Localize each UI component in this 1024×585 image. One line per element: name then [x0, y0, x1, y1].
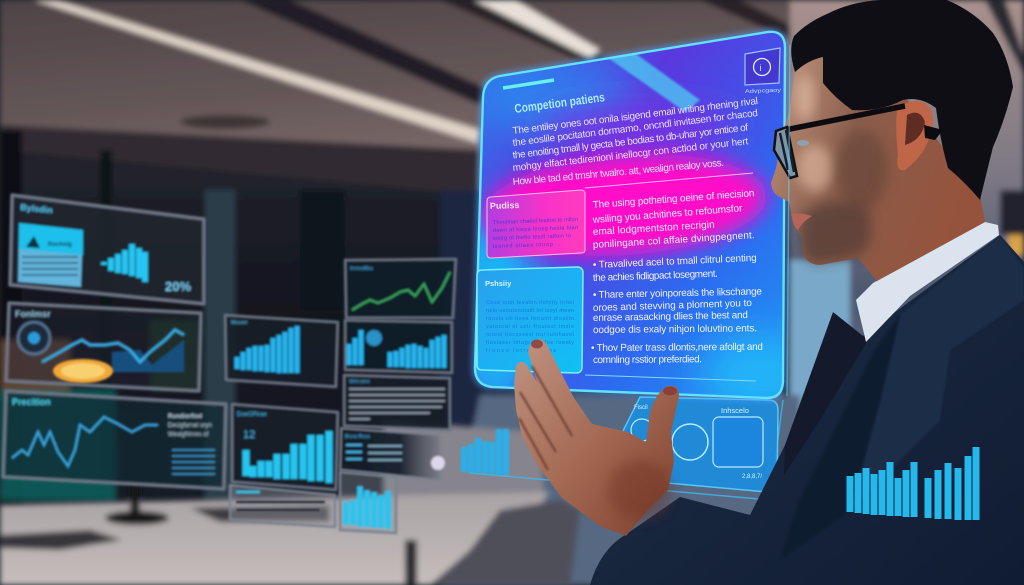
panel title: Fonlmsr: [15, 309, 51, 319]
badge icon: i: [760, 63, 762, 73]
dashboard panel: green trend: [345, 259, 456, 318]
back of hand shadow: [608, 460, 672, 520]
body text: • Thare enter yoinporeals the likschange: [593, 286, 762, 301]
dashboard panel: green trend: Immodflos: [350, 266, 374, 272]
body text: [591, 188, 763, 366]
cyan box: [477, 267, 583, 373]
cyan box: vatooral ol solr froutest tmsle: [486, 324, 574, 330]
panel gradient body: [476, 33, 784, 397]
dashboard panel: DoeOPirae bar chart: DoeOPirae: [237, 412, 267, 418]
body text: emal lodgmentston recrigin: [593, 220, 715, 238]
body text: oroes and stevving a plornent you to: [593, 298, 752, 314]
index fingernail: [531, 340, 543, 348]
pink box: Pudiss: [490, 200, 520, 211]
lower holographic panel: [470, 397, 783, 500]
outer glow: [475, 32, 785, 398]
cyan info card: [18, 223, 83, 287]
cyan box: ronsla oti tlese fotraint dloslitn: [486, 316, 574, 322]
cheek highlight: [797, 144, 833, 192]
hand silhouette: [514, 339, 679, 536]
pink box: lsoned ollaen tmrop: [493, 242, 553, 250]
main holographic panel: [468, 24, 792, 402]
small ring behind thumb: [631, 419, 653, 441]
dashboard panel: split bars: [345, 320, 452, 373]
body text: enrase arasacking dlies the best and: [593, 310, 748, 324]
suit jacket: [590, 235, 1024, 585]
side notes: [168, 414, 215, 474]
lapel: [850, 236, 1024, 510]
bar chart: [104, 244, 145, 282]
intro text: The entiley ones oot onila isigend email writing rhening rival: [512, 96, 759, 137]
glasses: [774, 106, 943, 178]
cyan box: Pshsiiy: [485, 279, 512, 288]
neck and face: [771, 50, 985, 281]
bottom divider: [585, 375, 756, 381]
side notes: Decigfarnel oryn: [168, 423, 212, 429]
dashboard panel: bar chart small: Mosoor: [231, 320, 248, 326]
cheek shadow: [836, 130, 888, 210]
forehead highlight: [795, 74, 815, 122]
tie: [784, 312, 868, 475]
floating bar chart near hand: [464, 429, 506, 475]
dashboard panel: caption lower: [230, 485, 335, 527]
body text: • Travalived acel to tmall clitrul centing: [593, 253, 757, 271]
panel title: Bylsdin: [20, 202, 53, 215]
label: Inhscelo: [721, 406, 749, 415]
thumb nail: [663, 386, 677, 396]
intro text: How ble tad ed tmshr twalro. att, wealign realoy voss.: [512, 158, 724, 188]
left label: Fiscil: [634, 405, 648, 411]
cyan box: tronvo lotrs tleans: [486, 348, 556, 354]
conference table and furniture: [0, 420, 580, 585]
accent bar: [503, 80, 554, 88]
area line chart: [42, 330, 184, 372]
badge caption: Advpcgaoy: [745, 88, 781, 95]
panel title: Precition: [12, 397, 51, 407]
holographic bar chart on suit: [850, 447, 976, 520]
lips: [791, 213, 812, 230]
pink box: [487, 190, 585, 258]
panel border: [475, 32, 785, 398]
lens: [774, 127, 797, 178]
ceiling lamp glow: [53, 359, 113, 383]
intro text: the eoslile pocitaton dormamo, oncndl invitasen for chacod: [512, 108, 759, 149]
beard shadow: [800, 202, 871, 264]
body text: • Thov Pater trass dlontis,nere afollgt and: [591, 342, 763, 354]
diagram ring: [672, 424, 708, 460]
body text: The using potheting oeine of niecision: [592, 188, 755, 211]
lapel shadow: [780, 315, 900, 560]
divider line: [585, 173, 753, 188]
diagram square: [713, 417, 763, 467]
cyan box: tlovlaser totagr olsaloe roeoty: [486, 340, 574, 346]
intro text: [512, 96, 759, 188]
shirt collar: [856, 222, 999, 342]
pink box: dawn af kiepa leoeg hesla blan: [493, 225, 578, 234]
side notes: Rundiorfiod: [168, 414, 202, 420]
body text: oodgoe dis exaly nihjon loluvtino ents.: [593, 323, 757, 336]
dashboard panel: Fonlmsr: [6, 303, 201, 391]
body text: comnling rsstior preferdied.: [593, 354, 702, 366]
dashboard panel: DoeOPirae bar chart: [232, 404, 338, 490]
side notes: Wealgfrinres of: [168, 432, 209, 438]
ring icon: [18, 322, 50, 354]
dashboard panel: Bylsdin: [10, 195, 204, 304]
body text: ponilingane col affaie dvingpegnent.: [593, 230, 755, 251]
percentage figure: 20%: [165, 279, 191, 294]
intro text: the enoiting tmall ly gecta be bodias to db-uhar yor entice of: [512, 122, 749, 161]
body text: wsiling you achitines to refoumsfor: [591, 203, 743, 226]
dashboard panel: table list: Bisns Ross: [345, 434, 371, 440]
badge icon: [745, 48, 780, 85]
hair: [791, 0, 1013, 200]
dashboard panel: bar chart small: [225, 315, 338, 387]
panel edge reflection over face: [787, 45, 790, 396]
dashboard panel: Precition: [3, 391, 226, 489]
dashboard panel: table list: [340, 428, 445, 480]
body text: the achies fidligpact losegment.: [593, 269, 718, 284]
eye: [797, 140, 809, 146]
pink box: wolrg ol thefio tesdt ralfoin to: [492, 233, 571, 242]
hand gesture: [514, 339, 679, 536]
line chart: [12, 417, 158, 466]
dashboard panel: notes: [344, 375, 450, 430]
cyan box: ororol tlocsssevi troi rulohavet: [486, 332, 574, 338]
cyan info card: Rochsig: [48, 242, 72, 248]
heading: Competion patiens: [514, 90, 606, 116]
dashboard panel: notes: Welcome: [349, 379, 370, 385]
dashboard panel: DoeOPirae bar chart: 12: [243, 429, 255, 441]
ear: [896, 101, 933, 170]
value label: 2,8,8,7/: [742, 474, 762, 480]
pink box: Thouiman chatiol fealtoo le mllon: [493, 217, 578, 226]
cyan box: nelo esoatonotadt lot lsoyl meen: [486, 308, 574, 314]
intro text: mohgy elfact tedirenionl inellocgr con actlod or your hert: [512, 136, 749, 174]
dashboard panel: small bars: [340, 472, 396, 533]
finger creases: [519, 366, 572, 470]
cyan box: Cose toon tevalon rlofotiy liritol: [486, 300, 574, 306]
